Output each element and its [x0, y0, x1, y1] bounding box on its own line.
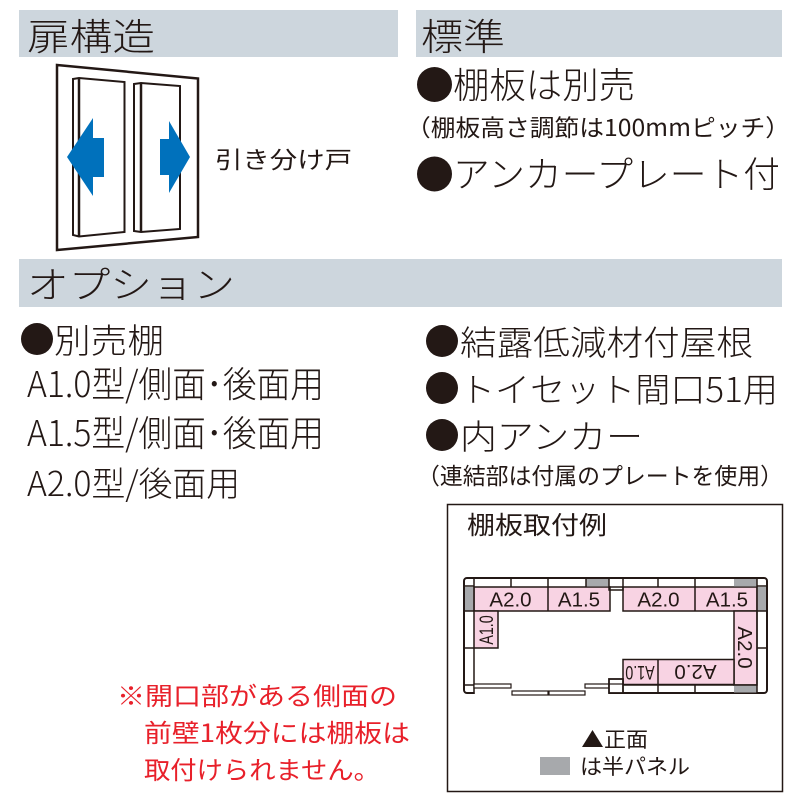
text: A1.5 shelf: A1.5型/側面･後面用 — [27, 405, 324, 457]
icon: sliding door diagram — [57, 65, 198, 250]
heading: door structure: 扉構造 — [27, 7, 155, 61]
heading: door structure — [19, 7, 398, 61]
heading: standard — [416, 7, 782, 61]
panel: shelf installation example — [448, 504, 782, 792]
label: A2.0 inverted: A2.0 — [674, 660, 717, 683]
heading: options — [19, 255, 782, 309]
chart: floor plan — [464, 578, 767, 695]
label: A2.0: A2.0 — [637, 588, 680, 612]
text: anchor plate included: アンカープレート付 — [453, 146, 780, 198]
label: sliding door: 引き分け戸 — [215, 141, 352, 175]
callout: red note: 前壁1枚分には棚板は — [144, 714, 410, 750]
legend: front: 正面 — [604, 724, 648, 754]
label: A1.5: A1.5 — [706, 588, 748, 612]
heading: installation example: 棚板取付例 — [467, 506, 607, 542]
text: connection note: （連結部は付属のプレートを使用） — [417, 457, 783, 491]
text: condensation reduction roof: 結露低減材付屋根 — [460, 316, 753, 365]
label: A2.0 vertical: A2.0 — [733, 626, 756, 669]
legend: front — [582, 724, 648, 754]
heading: standard: 標準 — [421, 7, 505, 61]
callout: red note — [117, 677, 410, 787]
text: shelf sold separately: 棚板は別売 — [453, 57, 635, 109]
text: toy set frontage 51: トイセット間口51用 — [460, 363, 778, 412]
heading: options: オプション — [27, 255, 235, 309]
text: separately sold shelves: 別売棚 — [54, 314, 164, 363]
text: A1.0 shelf: A1.0型/側面･後面用 — [27, 356, 324, 408]
label: A2.0: A2.0 — [489, 588, 532, 612]
text: shelf height note: （棚板高さ調節は100mmピッチ） — [406, 109, 790, 143]
legend: half panel: は半パネル — [580, 751, 690, 781]
label: A1.5: A1.5 — [558, 588, 600, 612]
label: A1.0 vertical: A1.0 — [476, 615, 498, 645]
text: inner anchor: 内アンカー — [460, 410, 643, 459]
callout: red note: ※開口部がある側面の — [117, 677, 397, 713]
callout: red note: 取付けられません。 — [144, 751, 380, 787]
label: A1.0 inverted: A1.0 — [625, 661, 655, 683]
text: A2.0 shelf: A2.0型/後面用 — [27, 457, 240, 506]
